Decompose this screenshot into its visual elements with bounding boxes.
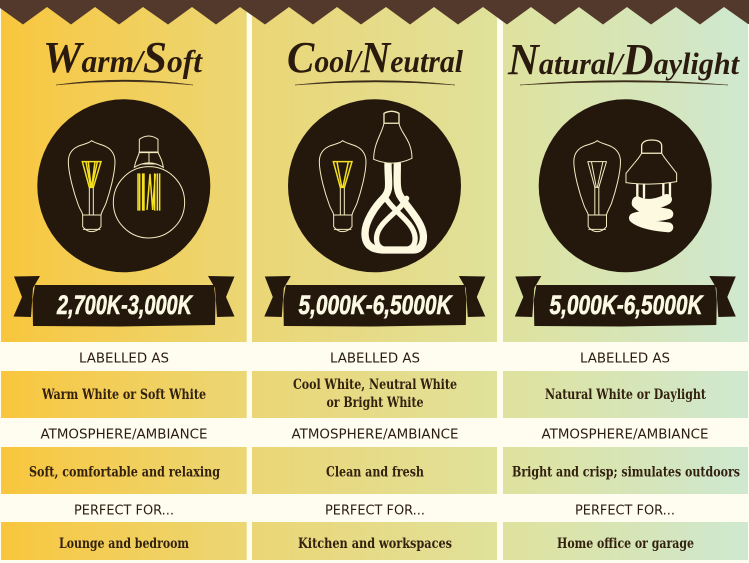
banner right ribbon (208, 276, 234, 317)
label values: Natural White or Daylight (545, 387, 706, 403)
panel: natural/daylight header (503, 0, 748, 342)
label headings (79, 352, 670, 367)
banner left ribbon (264, 276, 291, 317)
icon: edison bulb (68, 141, 115, 232)
title underline (295, 80, 455, 85)
icon circle (539, 99, 712, 272)
range value: 5,000K-6,5000K (550, 290, 704, 320)
atmosphere headings: ATMOSPHERE/AMBIANCE (40, 428, 208, 443)
title underline (56, 80, 193, 85)
title: Natural/Daylight: Natural/Daylight (507, 35, 740, 84)
range banner (515, 276, 736, 326)
label values (41, 377, 706, 411)
perfect-for values (59, 536, 694, 552)
icon: edison bulb (574, 141, 620, 232)
icon circle (37, 99, 210, 272)
row: atmosphere/ambiance (1, 428, 748, 494)
perfect-for headings: PERFECT FOR... (74, 504, 174, 519)
band (1, 522, 748, 560)
atmosphere values: Clean and fresh (326, 465, 424, 481)
panel: warm/soft header (1, 0, 247, 342)
title: Cool/Neutral: Cool/Neutral (287, 33, 463, 82)
perfect-for headings: PERFECT FOR... (325, 504, 425, 519)
label headings: LABELLED AS (580, 352, 670, 367)
band (1, 371, 748, 418)
banner plate (283, 285, 466, 326)
banner left ribbon (515, 276, 541, 317)
icon: edison bulb (319, 141, 366, 232)
banner plate (32, 285, 216, 326)
atmosphere values (29, 465, 740, 481)
label values: Warm White or Soft White (41, 387, 206, 403)
label headings: LABELLED AS (79, 352, 169, 367)
band (1, 447, 748, 494)
perfect-for headings: PERFECT FOR... (575, 504, 675, 519)
row: perfect for (1, 504, 748, 560)
zigzag top border (0, 0, 749, 24)
range banner (264, 276, 485, 326)
row: labelled as (1, 352, 748, 418)
perfect-for headings (74, 504, 675, 519)
label headings: LABELLED AS (330, 352, 420, 367)
column: cool/neutral (264, 33, 485, 326)
icon: globe bulb (113, 136, 185, 238)
range banner (14, 276, 234, 326)
banner plate (534, 285, 717, 326)
icon circle (288, 99, 461, 272)
label values: Cool White, Neutral White (293, 377, 457, 393)
title: Warm/Soft: Warm/Soft (43, 33, 203, 82)
panel: cool/neutral header (252, 0, 497, 342)
icon: spiral CFL bulb (626, 140, 677, 227)
atmosphere values: Soft, comfortable and relaxing (29, 465, 220, 481)
title underline (520, 80, 728, 85)
range value: 2,700K-3,000K (56, 290, 193, 320)
banner left ribbon (14, 276, 40, 317)
perfect-for values: Home office or garage (557, 536, 694, 552)
icon: pendant tube bulb (365, 111, 423, 250)
perfect-for values: Lounge and bedroom (59, 536, 189, 552)
column: natural/daylight (507, 35, 740, 326)
banner right ribbon (459, 276, 485, 317)
atmosphere headings: ATMOSPHERE/AMBIANCE (292, 428, 458, 443)
atmosphere headings (40, 428, 708, 443)
label values: or Bright White (326, 395, 424, 411)
perfect-for values: Kitchen and workspaces (298, 536, 452, 552)
range value: 5,000K-6,5000K (298, 290, 453, 320)
column: warm/soft (14, 33, 234, 326)
atmosphere headings: ATMOSPHERE/AMBIANCE (542, 428, 708, 443)
banner right ribbon (709, 276, 736, 317)
